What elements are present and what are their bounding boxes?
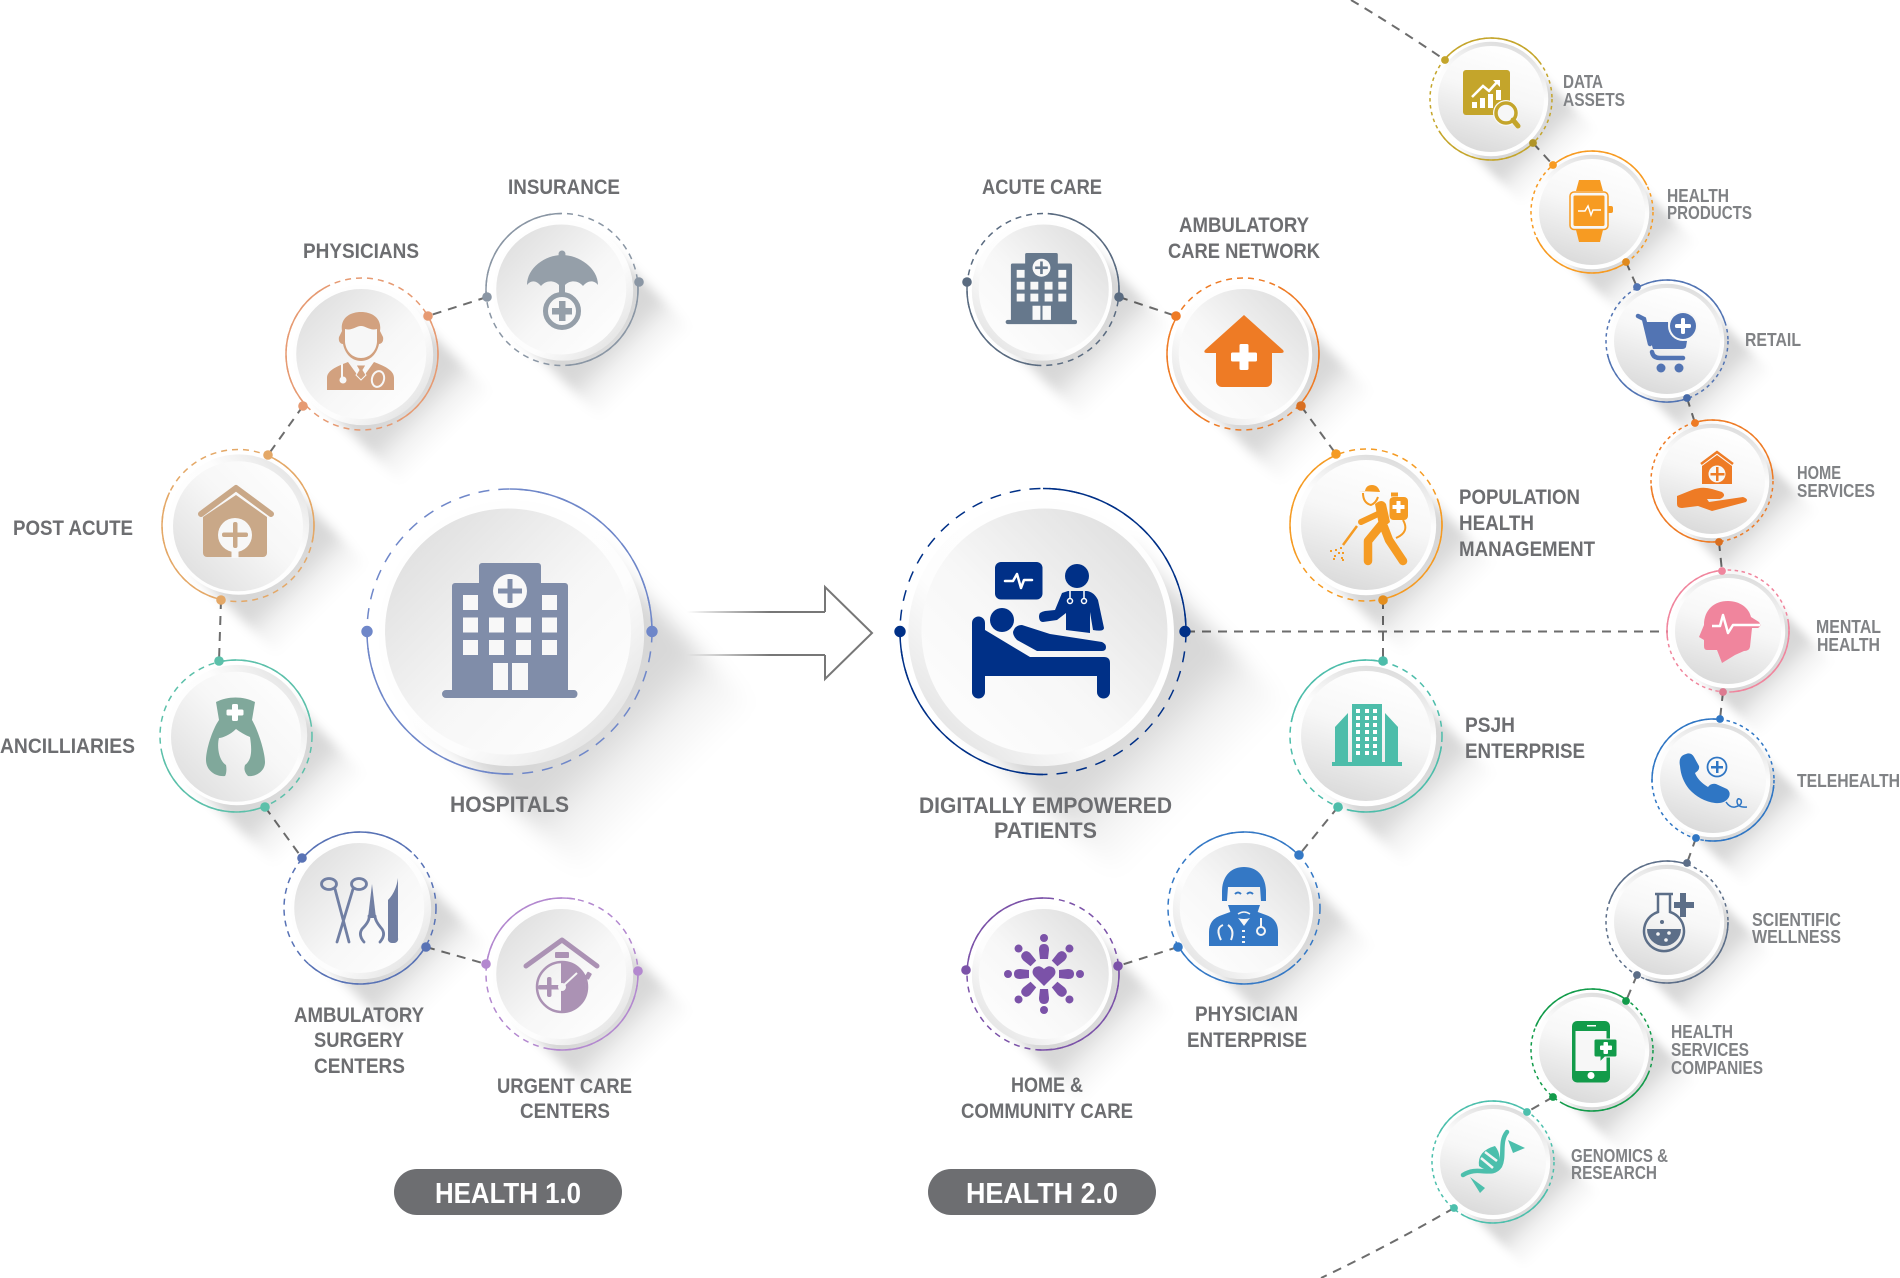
label: Ambulatory Surgery Centers: SURGERY (314, 1029, 404, 1052)
icon: umbrella with cross (527, 250, 598, 328)
pill: Health 2.0: HEALTH 2.0 (966, 1178, 1118, 1210)
label: Population Health Management: HEALTH (1459, 512, 1534, 535)
icon: person spraying disinfectant (1330, 485, 1408, 561)
label: Home Services: HOME (1797, 463, 1841, 483)
icon: house with cross (1204, 315, 1284, 387)
label: Ambulatory Care Network (1168, 214, 1320, 263)
label: PSJH Enterprise (1465, 714, 1585, 763)
node: Home and Community Care (961, 894, 1173, 1104)
label: Digitally Empowered Patients: PATIENTS (994, 818, 1097, 843)
label: Physician Enterprise (1187, 1003, 1307, 1052)
icon: masked physician (1209, 867, 1278, 946)
icon: hand holding house (1677, 452, 1747, 511)
label: Mental Health: HEALTH (1817, 635, 1880, 655)
icon: smartphone with medical message (1572, 1021, 1617, 1082)
label: Home Services: SERVICES (1797, 481, 1875, 501)
node: Post Acute (138, 426, 368, 656)
node: Genomics and Research (1411, 1080, 1599, 1268)
label: Genomics and Research: GENOMICS & (1571, 1146, 1668, 1166)
label: Insurance: INSURANCE (508, 176, 620, 199)
label: Urgent Care Centers: URGENT CARE (497, 1075, 632, 1098)
node: Home Services (1637, 406, 1818, 587)
node: Acute Care (962, 208, 1173, 420)
label: Post Acute: POST ACUTE (13, 517, 133, 540)
label: Home and Community Care: HOME & (1011, 1074, 1083, 1097)
node: Digitally Empowered Patients (894, 488, 1289, 878)
label: Scientific Wellness: WELLNESS (1752, 927, 1841, 947)
label: Ambulatory Care Network: AMBULATORY (1179, 214, 1309, 237)
label: Population Health Management: POPULATION (1459, 486, 1580, 509)
label: Ambulatory Surgery Centers: CENTERS (314, 1055, 405, 1078)
icon: shopping cart with plus (1638, 311, 1698, 372)
node: Physician Enterprise (1137, 801, 1374, 1038)
label: Physician Enterprise: PHYSICIAN (1195, 1003, 1298, 1026)
label: Physicians: PHYSICIANS (303, 240, 419, 263)
label: Ambulatory Surgery Centers (294, 1004, 424, 1078)
pill: Health 1.0 (394, 1169, 622, 1215)
label: Home and Community Care: COMMUNITY CARE (961, 1100, 1133, 1123)
icon: office towers (1332, 704, 1402, 766)
label: Data Assets: DATA (1563, 72, 1603, 92)
icon: chart with magnifier (1463, 70, 1519, 126)
icon: community around heart (1004, 934, 1084, 1014)
label: Mental Health: MENTAL (1816, 617, 1881, 637)
node: Mental Health (1661, 564, 1834, 737)
label: Health Services Companies: HEALTH (1671, 1022, 1733, 1042)
node: Population Health Management (1269, 428, 1496, 655)
icon: flask with plus (1644, 893, 1694, 951)
node: Ambulatory Care Network (1140, 251, 1373, 484)
node: Data Assets (1405, 13, 1597, 205)
icon: nurse (206, 698, 265, 776)
label: Ancillaries: ANCILLIARIES (0, 735, 135, 758)
node: Ambulatory Surgery Centers (253, 801, 490, 1038)
label: Health Products: PRODUCTS (1667, 203, 1752, 223)
label: Digitally Empowered Patients (919, 793, 1172, 843)
node: Physicians (258, 250, 492, 484)
label: Population Health Management (1459, 486, 1595, 561)
label: Genomics and Research: RESEARCH (1571, 1163, 1657, 1183)
label: Home Services (1797, 463, 1875, 501)
label: Urgent Care Centers: CENTERS (520, 1100, 610, 1123)
icon: house with cross (201, 488, 271, 558)
label: Hospitals: HOSPITALS (450, 792, 569, 817)
icon: hospital building (1006, 253, 1077, 324)
connector: upper arc into Data Assets (1351, 0, 1445, 60)
label: Retail: RETAIL (1745, 330, 1801, 350)
node: Health Services Companies (1512, 970, 1698, 1156)
icon: smart watch (1570, 180, 1613, 242)
node: Retail (1584, 258, 1773, 447)
node: Health Products (1506, 126, 1698, 318)
icon: hospital building (442, 563, 578, 698)
label: Scientific Wellness: SCIENTIFIC (1752, 910, 1841, 930)
label: Health Products: HEALTH (1667, 186, 1729, 206)
label: Genomics and Research (1571, 1146, 1668, 1183)
label: Population Health Management: MANAGEMENT (1459, 538, 1595, 561)
icon: head with pulse (1699, 601, 1760, 663)
pill: Health 2.0 (928, 1169, 1156, 1215)
node: Hospitals (361, 489, 756, 878)
label: Ambulatory Surgery Centers: AMBULATORY (294, 1004, 424, 1027)
label: Health Services Companies: COMPANIES (1671, 1058, 1763, 1078)
icon: DNA helix (1463, 1132, 1525, 1193)
label: PSJH Enterprise: PSJH (1465, 714, 1515, 737)
label: Scientific Wellness (1752, 910, 1841, 947)
node: PSJH Enterprise (1277, 647, 1496, 866)
label: Ambulatory Care Network: CARE NETWORK (1168, 240, 1320, 263)
arrow: Health 1.0 to Health 2.0 (687, 587, 872, 679)
label: Acute Care: ACUTE CARE (982, 176, 1102, 199)
label: Data Assets: ASSETS (1563, 90, 1625, 110)
connectors: Health 1.0 chain (219, 297, 487, 964)
node: Scientific Wellness (1590, 845, 1773, 1028)
label: Physician Enterprise: ENTERPRISE (1187, 1029, 1307, 1052)
label: PSJH Enterprise: ENTERPRISE (1465, 740, 1585, 763)
label: Health Services Companies (1671, 1022, 1763, 1078)
node: Ancillaries (145, 645, 366, 866)
node: Telehealth (1650, 715, 1819, 886)
node: Urgent Care Centers (476, 888, 692, 1104)
label: Health Products (1667, 186, 1752, 223)
icon: stopwatch under roof (526, 940, 597, 1012)
label: Urgent Care Centers (497, 1075, 632, 1123)
icon: patient in bed with doctor (972, 562, 1110, 698)
node: Insurance (480, 207, 692, 420)
pill: Health 1.0: HEALTH 1.0 (435, 1178, 581, 1210)
label: Home and Community Care (961, 1074, 1133, 1123)
icon: telephone with plus (1680, 753, 1747, 807)
label: Data Assets (1563, 72, 1625, 110)
connectors: Health 2.0 chain (1118, 297, 1383, 966)
label: Mental Health (1816, 617, 1881, 655)
label: Health Services Companies: SERVICES (1671, 1040, 1749, 1060)
connector: Digitally Empowered Patients to Mental Health (1186, 630, 1668, 632)
icon: surgical tools (322, 878, 398, 943)
connector: lower arc out of Genomics (1321, 1208, 1454, 1278)
connectors: outer arc chain (1527, 143, 1723, 1112)
icon: doctor (327, 312, 394, 390)
label: Digitally Empowered Patients: DIGITALLY EMPOWERED (919, 793, 1172, 818)
